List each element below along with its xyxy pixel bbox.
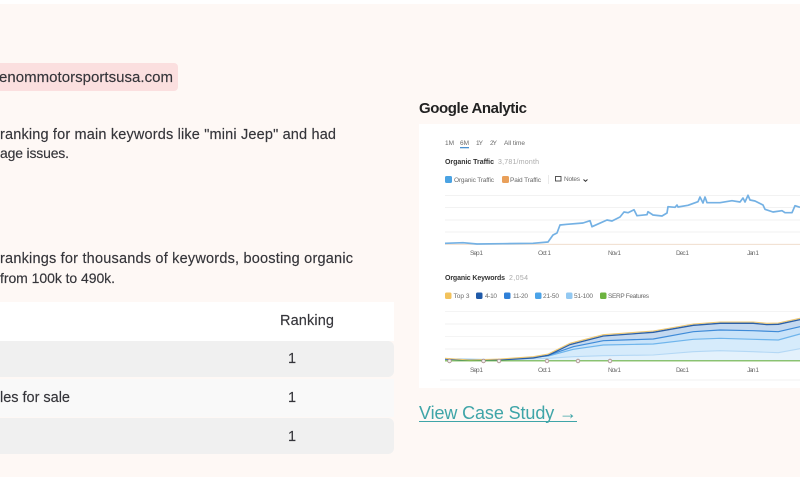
text block: problem description	[0, 127, 336, 161]
organic keywords legend: 21-50	[543, 293, 559, 300]
traffic chart date axis: Nov 1	[608, 250, 621, 257]
organic traffic heading: 3,781/month	[498, 159, 539, 166]
link: View Case Study: View Case Study →	[419, 403, 577, 423]
keyword ranking table: 1	[288, 429, 296, 445]
heading: Google Analytic: Google Analytic	[419, 100, 527, 117]
organic keywords legend: 4-10	[485, 293, 497, 300]
text block: results description: rankings for thousands of keywords, boosting organic	[0, 251, 353, 267]
keyword ranking table	[0, 302, 394, 454]
organic keywords stacked area chart	[445, 318, 800, 361]
website address pill: enommotorsportsusa.com	[0, 69, 173, 86]
keywords chart date axis: Oct 1	[538, 367, 551, 374]
traffic chart date axis: Oct 1	[538, 250, 551, 257]
keywords chart date axis: Dec 1	[676, 367, 689, 374]
keyword ranking table: 1	[288, 351, 296, 367]
Google update markers	[448, 359, 612, 363]
time range tabs: 6M	[460, 140, 469, 147]
organic traffic line chart	[445, 195, 800, 244]
keywords chart date axis: Sep 1	[470, 367, 483, 374]
time range tabs: 1M	[445, 140, 454, 147]
time range tabs: 2Y	[490, 140, 498, 147]
organic keywords legend	[445, 292, 650, 300]
keywords chart date axis: Nov 1	[608, 367, 621, 374]
organic keywords legend: 11-20	[513, 293, 528, 300]
organic traffic legend: Paid Traffic	[510, 177, 542, 184]
organic keywords heading: Organic Keywords	[445, 275, 505, 282]
analytics screenshot panel	[419, 124, 800, 388]
keywords chart date axis	[470, 367, 759, 374]
text block: problem description: age issues.	[0, 145, 69, 161]
organic traffic legend: Organic Traffic	[454, 177, 495, 184]
text block: problem description: ranking for main keywords like "mini Jeep" and had	[0, 127, 336, 143]
text block: results description	[0, 251, 353, 286]
organic keywords legend: 51-100	[574, 293, 593, 300]
organic traffic legend: Notes	[564, 176, 581, 183]
text block: results description: from 100k to 490k.	[0, 270, 115, 286]
keywords chart date axis: Jan 1	[747, 367, 759, 374]
traffic chart date axis: Dec 1	[676, 250, 689, 257]
time range tabs: 1Y	[476, 140, 484, 147]
keyword ranking table: les for sale	[0, 390, 70, 406]
website address pill	[0, 63, 178, 91]
organic traffic heading: Organic Traffic	[445, 159, 494, 166]
time range tabs: All time	[504, 140, 525, 147]
organic traffic legend	[445, 175, 588, 184]
organic keywords legend: SERP Features	[608, 293, 650, 300]
traffic chart date axis: Sep 1	[470, 250, 483, 257]
traffic chart date axis: Jan 1	[747, 250, 759, 257]
keyword ranking table: Ranking	[280, 313, 334, 329]
organic traffic heading	[445, 159, 539, 166]
organic keywords heading: 2,054	[509, 275, 528, 282]
organic keywords legend: Top 3	[454, 293, 470, 300]
keyword ranking table: 1	[288, 390, 296, 406]
time range tabs	[445, 140, 525, 148]
traffic chart date axis	[470, 250, 759, 257]
